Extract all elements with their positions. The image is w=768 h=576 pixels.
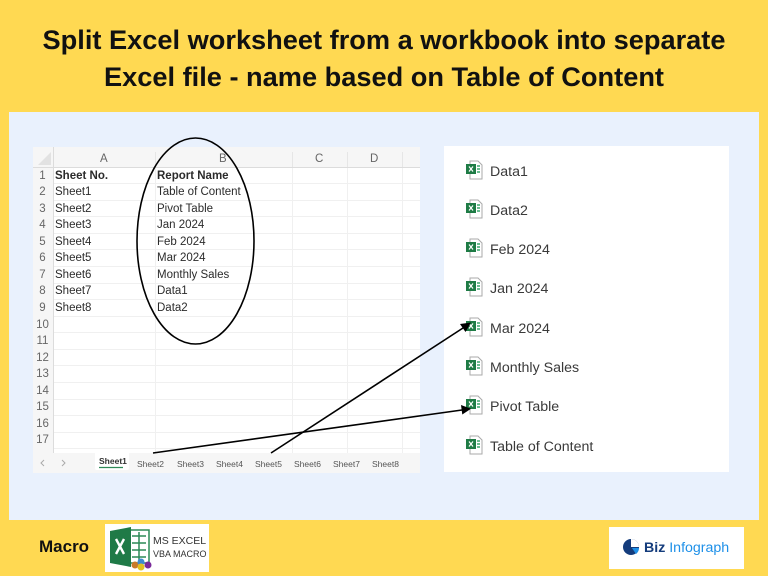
- column A: sheet numbers: Sheet1: [55, 186, 91, 198]
- row numbers: 1: [39, 170, 46, 182]
- file: Monthly Sales: [466, 356, 579, 376]
- column B: report names: Jan 2024: [157, 219, 204, 231]
- row numbers: 5: [39, 236, 46, 248]
- row numbers: 10: [36, 318, 49, 330]
- column A: sheet numbers: Sheet3: [55, 219, 91, 231]
- column headers: A: [100, 153, 108, 165]
- arrow: Sheet2 to Pivot Table: [152, 405, 471, 454]
- column headers: C: [315, 153, 323, 165]
- logo: Biz Infograph: Biz Infograph: [644, 540, 729, 556]
- row numbers: 9: [39, 302, 46, 314]
- column B: report names: Feb 2024: [157, 236, 206, 248]
- column B: report names: Report Name: [157, 170, 229, 182]
- sheet tabs: Sheet3: [177, 459, 204, 469]
- file: Mar 2024: [466, 318, 550, 337]
- column B: report names: Pivot Table: [157, 202, 213, 214]
- sheet tabs: Sheet5: [255, 459, 282, 469]
- column B: report names: Table of Content: [157, 186, 241, 198]
- column A: sheet numbers: Sheet4: [55, 236, 91, 248]
- column A: sheet numbers: [55, 170, 108, 314]
- file: Pivot Table: [466, 396, 559, 415]
- column A: sheet numbers: Sheet8: [55, 302, 91, 314]
- column A: sheet numbers: Sheet No.: [55, 170, 108, 182]
- label: Macro: Macro: [39, 537, 89, 556]
- file: Data1: Data1: [490, 164, 528, 180]
- file: Monthly Sales: Monthly Sales: [490, 360, 579, 376]
- sheet tabs: Sheet8: [372, 459, 399, 469]
- file: Jan 2024: [466, 278, 548, 297]
- sheet tabs: Sheet4: [216, 459, 243, 469]
- sheet tabs: Sheet7: [333, 459, 360, 469]
- file: Jan 2024: Jan 2024: [490, 281, 548, 297]
- column B: report names: Data1: [157, 285, 188, 297]
- title: Split Excel worksheet from a workbook into separate: [43, 24, 725, 55]
- file: Feb 2024: [466, 238, 550, 258]
- logo: MS Excel VBA Macro: MS EXCEL: [153, 535, 206, 547]
- file: Data2: [466, 200, 528, 219]
- row numbers: 6: [39, 252, 46, 264]
- row numbers: 3: [39, 202, 46, 214]
- panel: Excel worksheet: [33, 147, 420, 473]
- logo: MS Excel VBA Macro: [105, 524, 209, 572]
- panel: exported files list: [444, 146, 729, 472]
- column B: report names: Mar 2024: [157, 252, 206, 264]
- column A: sheet numbers: Sheet7: [55, 285, 91, 297]
- logo: Biz Infograph: [609, 527, 744, 569]
- row numbers: 8: [39, 285, 46, 297]
- file: Table of Content: Table of Content: [490, 439, 593, 455]
- column B: report names: Data2: [157, 302, 188, 314]
- column headers: D: [370, 153, 378, 165]
- column A: sheet numbers: Sheet2: [55, 202, 91, 214]
- sheet tabs: Sheet2: [137, 459, 164, 469]
- column headers: [100, 153, 378, 165]
- sheet tabs: [99, 456, 399, 469]
- file: Mar 2024: Mar 2024: [490, 321, 550, 337]
- column A: sheet numbers: Sheet6: [55, 269, 91, 281]
- file: Feb 2024: Feb 2024: [490, 242, 550, 258]
- column B: report names: [157, 170, 241, 314]
- sheet tabs: Sheet6: [294, 459, 321, 469]
- row numbers: 11: [37, 335, 48, 347]
- row numbers: [36, 170, 49, 446]
- row numbers: 16: [36, 418, 49, 430]
- row numbers: 2: [39, 186, 46, 198]
- title: [43, 24, 725, 92]
- file: Table of Content: [466, 436, 594, 455]
- ellipse around column B: [136, 137, 255, 345]
- row numbers: 15: [36, 401, 49, 413]
- row numbers: 12: [36, 352, 49, 364]
- file: Data2: Data2: [490, 203, 528, 219]
- file: Data1: [466, 160, 528, 180]
- row numbers: 13: [36, 368, 49, 380]
- arrow: Sheet5 to Mar 2024: [270, 322, 471, 454]
- title: Excel file - name based on Table of Content: [104, 61, 664, 92]
- row numbers: 17: [36, 434, 49, 446]
- row numbers: 7: [39, 269, 46, 281]
- panel: main light blue background: [9, 112, 759, 520]
- column headers: B: [219, 153, 227, 165]
- column B: report names: Monthly Sales: [157, 269, 229, 281]
- logo: MS Excel VBA Macro: VBA MACRO: [153, 549, 207, 559]
- sheet tabs: Sheet1: [99, 456, 127, 466]
- column A: sheet numbers: Sheet5: [55, 252, 91, 264]
- row numbers: 14: [36, 385, 49, 397]
- row numbers: 4: [39, 219, 46, 231]
- file: Pivot Table: Pivot Table: [490, 399, 559, 415]
